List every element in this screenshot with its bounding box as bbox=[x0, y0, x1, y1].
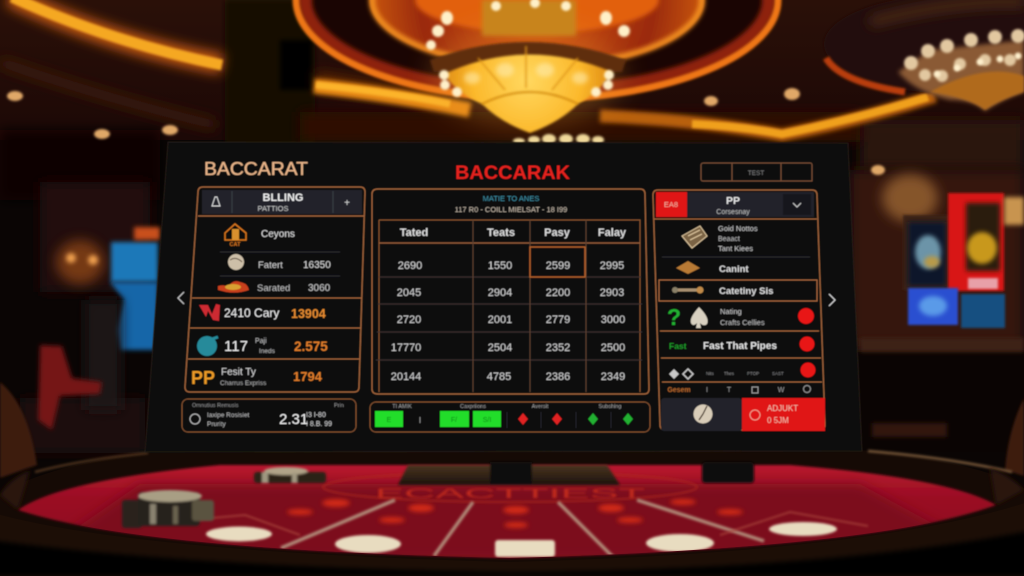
row: Nating: ? bbox=[667, 304, 681, 330]
row: PP Fesit Ty: PP bbox=[191, 368, 215, 388]
data table: 17770 bbox=[391, 342, 421, 354]
green buttons: E bbox=[387, 417, 392, 424]
row: Fast That Pipes: Fast That Pipes bbox=[703, 341, 777, 352]
row: Canint bbox=[676, 261, 749, 275]
outer ring bbox=[296, 0, 778, 99]
row: Fatert: 16350 bbox=[303, 260, 331, 271]
bright coves bbox=[314, 86, 470, 110]
data table: 20144 bbox=[391, 371, 421, 383]
top right tab control bbox=[701, 163, 812, 181]
data table: 2995 bbox=[600, 260, 624, 272]
right header: Corsesnay bbox=[716, 209, 750, 216]
right header: EA8 bbox=[664, 200, 678, 209]
table foreground rail bbox=[0, 500, 1024, 576]
data table: Teats bbox=[487, 227, 515, 239]
monitor stand bbox=[398, 462, 754, 485]
panel: center footer controls: Caxpriions bbox=[460, 404, 486, 410]
row: 117: Paji bbox=[255, 338, 267, 345]
row: Sarated: Sarated bbox=[257, 283, 290, 294]
row: 2410 Cary: 13904 bbox=[291, 307, 326, 321]
panel: left stats bbox=[185, 187, 365, 392]
row: Nating: Nating bbox=[720, 307, 742, 316]
rim bbox=[430, 42, 626, 72]
row: 2410 Cary bbox=[199, 304, 326, 321]
green buttons: I bbox=[419, 416, 421, 425]
data table: 1550 bbox=[488, 260, 512, 272]
panel: left footer summary: Prurity bbox=[207, 421, 227, 428]
row: Nating bbox=[660, 304, 819, 331]
data table: 2500 bbox=[601, 342, 625, 354]
row: Gesem icon strip: Gesem bbox=[667, 387, 691, 394]
title left: BACCARAT: BACCARAT bbox=[204, 158, 308, 179]
crown bbox=[482, 0, 576, 36]
action buttons bbox=[661, 398, 825, 431]
panel: left footer summary: Iaxipe Rosisiet bbox=[207, 412, 249, 419]
row: 117: Ineds bbox=[259, 348, 276, 355]
row: Gesem icon strip: T bbox=[727, 387, 732, 394]
ceiling downlights bbox=[7, 88, 885, 175]
data table: Falay bbox=[598, 227, 627, 239]
row: Ceyons bbox=[225, 224, 295, 248]
data table: 2720 bbox=[397, 314, 421, 326]
row: Sarated: 3060 bbox=[308, 283, 331, 294]
right background screens bbox=[882, 174, 1024, 476]
data table: 2045 bbox=[397, 287, 421, 299]
table subtitle: 117 R0 - COILL MIELSAT - 18 I99 bbox=[455, 205, 567, 214]
left panel header bbox=[198, 190, 364, 216]
right header: PP bbox=[726, 195, 740, 207]
row: Canint: Canint bbox=[719, 264, 749, 275]
data table: 2504 bbox=[488, 342, 512, 354]
bowl bbox=[444, 54, 612, 133]
table subtitle bbox=[455, 194, 567, 214]
row: PP Fesit Ty: Fesit Ty bbox=[221, 367, 256, 378]
row: card text: Beaact bbox=[718, 236, 740, 243]
red and green diamonds bbox=[507, 412, 633, 428]
row: Nating: Crafts Cellies bbox=[720, 318, 765, 327]
data table: 3000 bbox=[601, 314, 625, 326]
left background screens and lamp bbox=[0, 227, 160, 478]
row: card text: Goid Nottos bbox=[718, 224, 758, 233]
row: Fatert bbox=[228, 254, 331, 271]
row: small icons: Nits bbox=[706, 371, 714, 376]
right arrow bbox=[829, 294, 835, 306]
data table: Pasy bbox=[544, 227, 571, 239]
data table: 2200 bbox=[546, 287, 570, 299]
ceiling light coves bbox=[0, 0, 1024, 142]
row: PP Fesit Ty bbox=[191, 367, 323, 388]
row: 117: 2.575 bbox=[294, 339, 328, 354]
top right tab control: TEST bbox=[748, 170, 764, 177]
right header bbox=[656, 192, 814, 217]
main chandelier bbox=[426, 0, 630, 144]
right chandelier bbox=[898, 29, 1024, 111]
row: Categtiry Sis bbox=[659, 280, 817, 301]
panel: center footer controls: TI AMIK bbox=[392, 404, 412, 410]
row: Sarated bbox=[218, 281, 331, 294]
data table: 2690 bbox=[398, 260, 422, 272]
table subtitle: MATIE TO ANES bbox=[483, 194, 539, 203]
panel: center footer controls bbox=[370, 402, 650, 432]
left panel header: BLLING bbox=[263, 192, 303, 204]
panel: right column bbox=[653, 190, 825, 431]
row: Gesem icon strip: W bbox=[778, 387, 785, 394]
panel: left footer summary: I 8.B. 99 bbox=[306, 421, 332, 428]
data table: Tated bbox=[400, 227, 428, 239]
row: Fatert: Fatert bbox=[258, 260, 283, 271]
panel: left footer summary bbox=[182, 399, 356, 432]
row: PP Fesit Ty: 1794 bbox=[293, 369, 323, 384]
row: card text: Tant Kiees bbox=[718, 244, 753, 253]
row: card text bbox=[682, 224, 758, 253]
data table: 4785 bbox=[487, 371, 511, 383]
row: Fast That Pipes bbox=[661, 336, 821, 358]
row: 117: 117 bbox=[224, 338, 248, 355]
row: Gesem icon strip: I bbox=[706, 387, 708, 394]
panel: left footer summary: Prin bbox=[334, 403, 344, 409]
data table: 2349 bbox=[601, 371, 625, 383]
row: Gesem icon strip bbox=[667, 386, 810, 394]
row: 117 bbox=[197, 336, 328, 356]
panel: center footer controls: Aversit bbox=[532, 404, 549, 410]
row: Ceyons: CAT bbox=[230, 242, 241, 248]
row: small icons: PTOP bbox=[747, 371, 759, 376]
data table: 2001 bbox=[488, 314, 512, 326]
green buttons: F/ bbox=[451, 417, 457, 424]
row: PP Fesit Ty: Charrus Expriss bbox=[220, 380, 267, 387]
row: Ceyons: Ceyons bbox=[261, 229, 295, 240]
row: Categtiry Sis: Catetiny Sis bbox=[719, 286, 773, 297]
title center: BACCARAK: BACCARAK bbox=[455, 163, 570, 184]
row: small icons: SAST bbox=[772, 371, 784, 376]
data table: 2599 bbox=[546, 260, 570, 272]
inner ring bbox=[370, 0, 704, 68]
table layout markings bbox=[78, 475, 934, 558]
row: Fast That Pipes: Fast bbox=[669, 341, 687, 351]
row: small icons bbox=[662, 362, 822, 382]
data table: 2386 bbox=[546, 371, 570, 383]
left panel header: + bbox=[344, 198, 350, 209]
left arrow bbox=[178, 292, 184, 304]
panel: center footer controls: Subshing bbox=[599, 404, 621, 410]
data table bbox=[376, 220, 642, 392]
data table: 2352 bbox=[546, 342, 570, 354]
data table: 2779 bbox=[546, 314, 570, 326]
panel: left footer summary: 2.31 bbox=[279, 411, 308, 428]
left panel header: PATTIOS bbox=[258, 204, 288, 213]
table text: ECACTTIEST bbox=[375, 485, 646, 501]
panel: center table bbox=[372, 189, 649, 394]
monitor bbox=[145, 142, 862, 452]
row: 2410 Cary: 2410 Cary bbox=[224, 306, 279, 320]
panel: left footer summary: Omnutius Remusis bbox=[192, 403, 239, 409]
green buttons: S/I bbox=[483, 417, 491, 424]
green buttons bbox=[375, 411, 501, 427]
data table: 2904 bbox=[488, 287, 512, 299]
panel: left footer summary: I3 I-80 bbox=[306, 412, 326, 419]
data table: 2903 bbox=[600, 287, 624, 299]
row: small icons: Thes bbox=[724, 371, 735, 376]
baccarat table bbox=[0, 450, 1024, 576]
action buttons: 0 5JM bbox=[767, 416, 789, 425]
action buttons: ADJUKT bbox=[767, 404, 798, 413]
poker chips bbox=[122, 467, 326, 528]
